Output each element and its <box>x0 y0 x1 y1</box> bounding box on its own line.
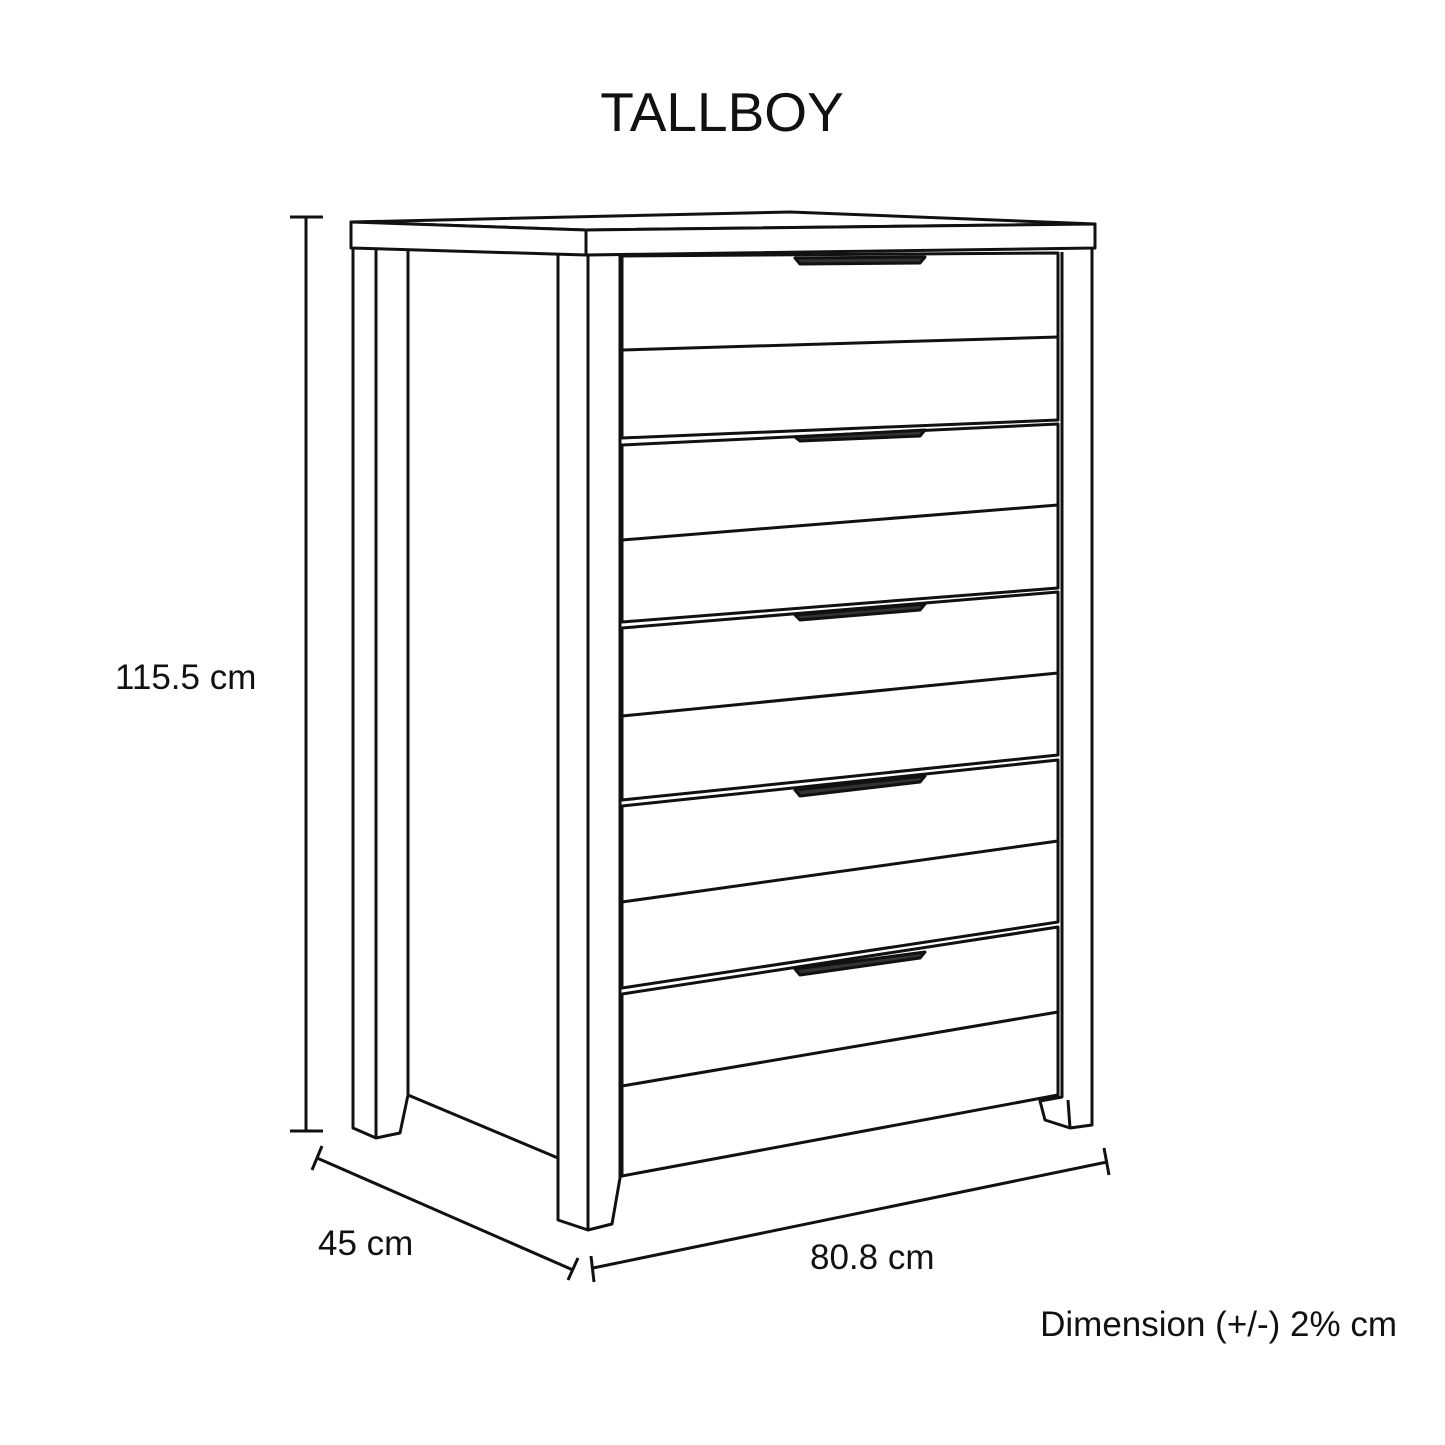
back left leg <box>353 248 408 1138</box>
drawer 2 <box>622 424 1058 622</box>
label: height: 115.5 cm <box>115 658 256 697</box>
drawer 4 <box>622 760 1058 988</box>
dimension: depth <box>312 1146 578 1280</box>
label: depth: 45 cm <box>318 1224 413 1263</box>
right leg <box>1040 248 1092 1128</box>
drawing: tallboy <box>351 212 1095 1230</box>
drawer 1 <box>622 253 1058 438</box>
title: TALLBOY <box>600 81 844 143</box>
top slab <box>351 212 1095 255</box>
side panel <box>408 1095 558 1158</box>
label: width: 80.8 cm <box>810 1238 934 1277</box>
drawer 3 <box>622 592 1058 800</box>
dimension: height <box>290 217 323 1131</box>
dimension: width <box>591 1148 1109 1282</box>
front left leg <box>558 255 620 1230</box>
drawer 5 <box>622 927 1058 1176</box>
note: tolerance: Dimension (+/-) 2% cm <box>1040 1305 1397 1344</box>
